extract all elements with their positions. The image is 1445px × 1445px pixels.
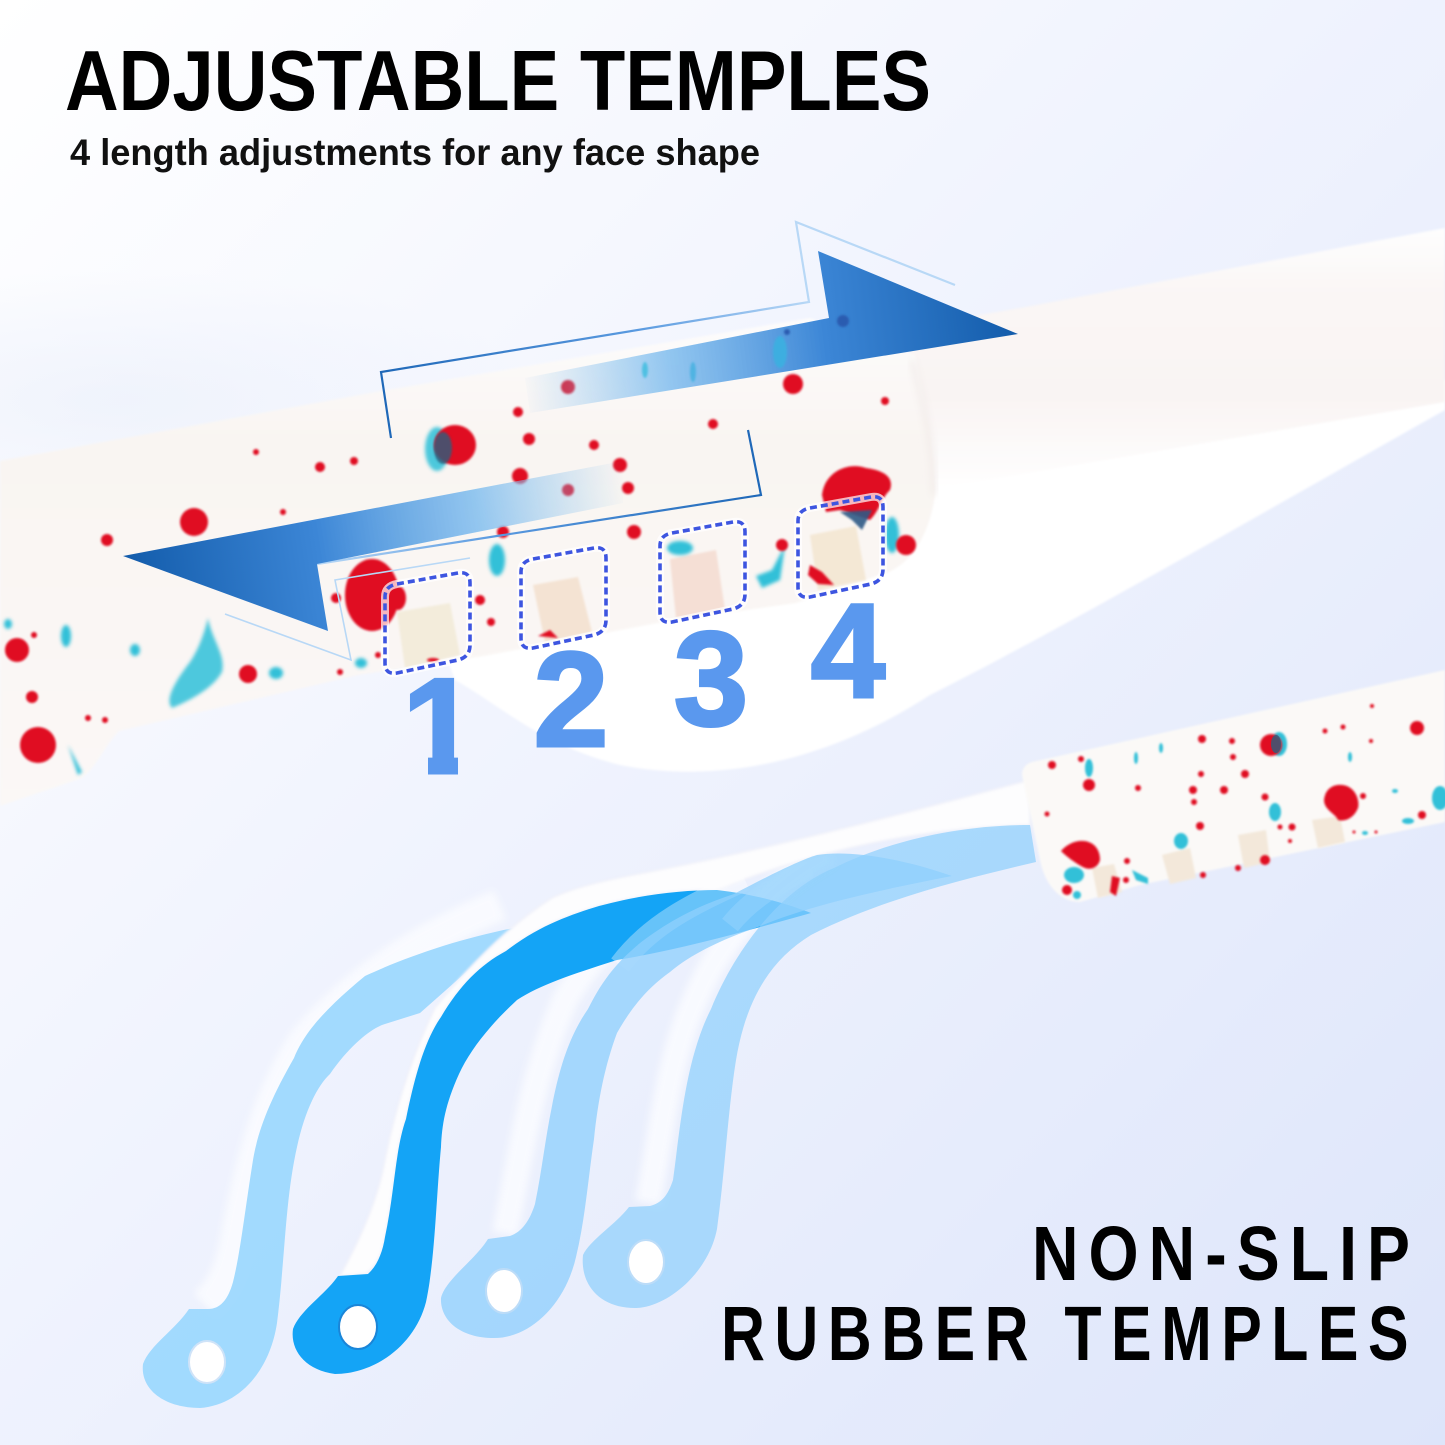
translucent arm highlights over dark tip xyxy=(620,868,810,965)
white shading of ghost arms xyxy=(205,852,830,1305)
slide holes xyxy=(397,526,866,668)
thick perforated sleeve xyxy=(0,318,935,806)
number 4: 4 xyxy=(811,577,885,726)
sleeve shoulder shading xyxy=(912,360,934,495)
red speckles xyxy=(5,374,916,763)
speckles through arrow xyxy=(642,315,849,382)
rubber tips illustration xyxy=(143,780,1036,1408)
arrow outline xyxy=(317,430,761,564)
left arrow xyxy=(123,430,761,660)
lower temple sleeve xyxy=(1022,670,1445,902)
number 3: 3 xyxy=(674,605,748,754)
tip 4 xyxy=(583,825,1036,1308)
teal speckles xyxy=(4,427,899,775)
teal speckles xyxy=(1064,732,1445,899)
arrow outline xyxy=(381,222,955,438)
upper temple: adjustable thick section with slide holes xyxy=(0,228,1445,806)
arrow body xyxy=(123,461,623,631)
subtitle: 4 length adjustments for any face shape xyxy=(70,132,760,173)
title: ADJUSTABLE TEMPLES xyxy=(65,34,931,129)
white arm of tip 2 xyxy=(340,780,1030,1276)
bottom headline xyxy=(721,1211,1420,1377)
tip 2 xyxy=(293,890,811,1374)
marker 3 xyxy=(660,522,745,622)
number 1: 1 xyxy=(402,650,478,802)
marker 1 xyxy=(385,573,470,673)
arrow body xyxy=(525,251,1018,413)
number 2: 2 xyxy=(533,624,609,775)
tip 1 xyxy=(143,925,530,1408)
pale haze above temple xyxy=(0,270,540,530)
thin temple arm xyxy=(905,228,1445,490)
tip 3 xyxy=(441,854,952,1338)
white swoosh behind temple xyxy=(440,380,1445,772)
position labels and dashed markers xyxy=(385,497,885,802)
marker 4 xyxy=(798,497,883,597)
marker 2 xyxy=(521,548,606,648)
red speckles xyxy=(1044,704,1426,896)
dark overlap spot xyxy=(1271,735,1281,753)
right arrow xyxy=(381,222,1018,438)
slide holes xyxy=(1092,816,1345,898)
dark overlap spots xyxy=(434,432,452,464)
sleeve body xyxy=(1022,670,1445,902)
